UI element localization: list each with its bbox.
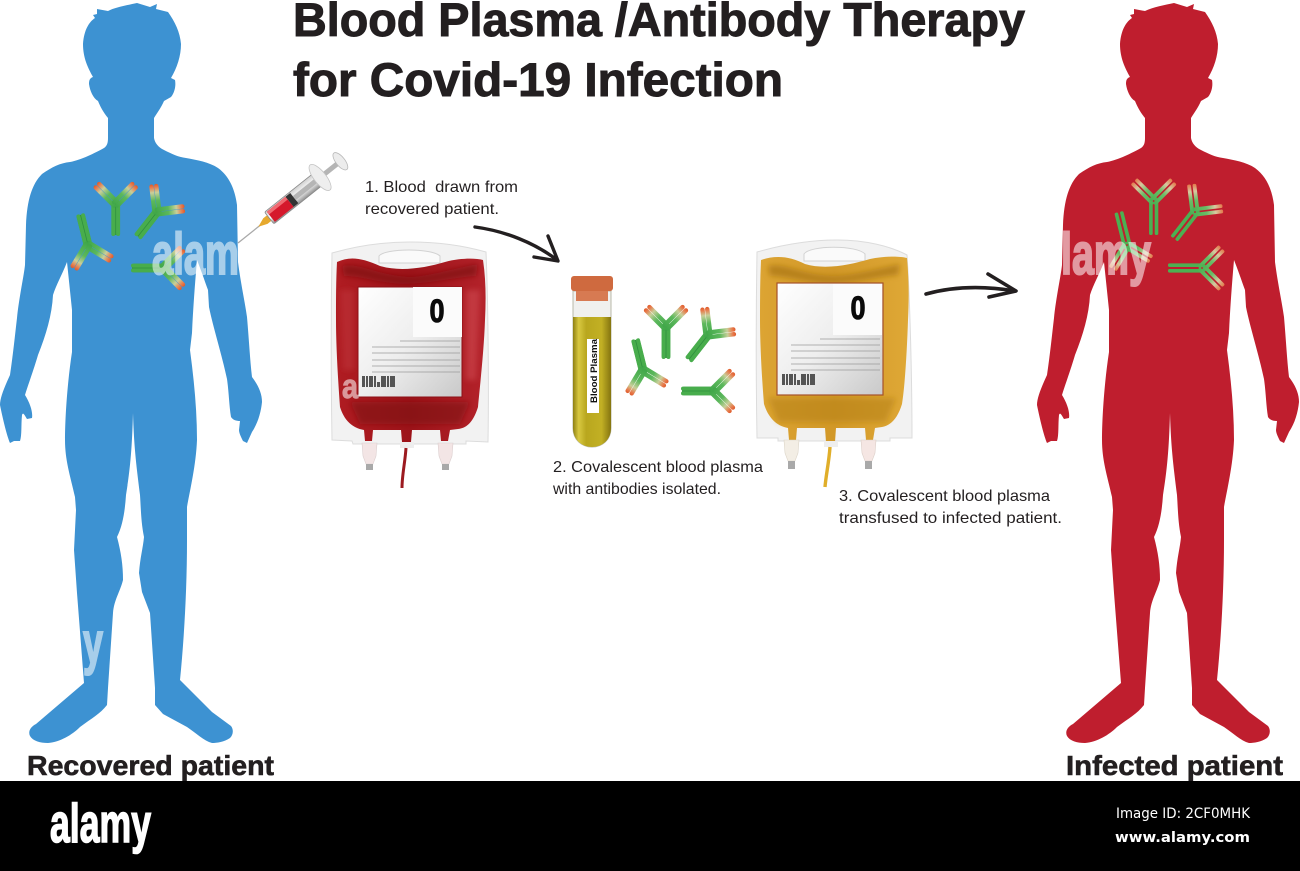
panel: recovered patient silhouette	[0, 3, 262, 743]
arrow: bag to infected patient	[926, 274, 1016, 297]
image id: Image ID: 2CF0MHK	[1116, 806, 1251, 822]
panel: red blood bag	[331, 242, 488, 488]
antibodies: isolated group	[613, 303, 740, 414]
bag handle	[379, 250, 440, 263]
blood type: 0	[850, 290, 866, 326]
panel: infected patient silhouette	[1037, 3, 1299, 743]
ports and tube	[784, 440, 876, 487]
bag handle	[804, 247, 865, 261]
text: step 2	[552, 459, 763, 498]
label lines	[791, 339, 880, 370]
text: step 2: 2. Covalescent blood plasma	[553, 459, 763, 476]
watermarks: a	[342, 368, 359, 406]
plasma shading	[768, 264, 900, 422]
watermarks: lamy	[1061, 222, 1151, 287]
panel: plasma test tube	[571, 276, 613, 447]
text: step 1	[365, 179, 518, 218]
logo: alamy: alamy	[50, 792, 151, 854]
tube cap	[571, 276, 613, 291]
text: step 3	[839, 488, 1062, 527]
antibodies in recovered patient	[58, 180, 189, 291]
blood type: 0	[430, 293, 444, 329]
text: step 2: with antibodies isolated.	[552, 481, 721, 498]
watermarks: alam	[152, 222, 239, 287]
title	[293, 0, 1025, 106]
tube glass	[573, 291, 611, 447]
title: for Covid-19 Infection	[293, 53, 783, 106]
plasma fill	[760, 257, 909, 442]
label	[777, 283, 883, 395]
barcode	[782, 374, 815, 385]
label: recovered patient: Recovered patient	[27, 750, 274, 781]
tube label	[587, 339, 599, 413]
watermarks	[83, 222, 1151, 676]
ports and tube	[362, 442, 453, 488]
plasma	[573, 317, 611, 447]
label lines	[372, 341, 460, 372]
panel: yellow plasma bag	[756, 240, 912, 487]
blood fill	[336, 259, 486, 442]
text: step 3: 3. Covalescent blood plasma	[839, 488, 1050, 505]
text: step 3: transfused to infected patient.	[839, 510, 1062, 527]
antibodies in infected patient	[1096, 178, 1227, 291]
watermarks: y	[83, 611, 103, 676]
bag plastic	[331, 242, 488, 444]
blood shading	[340, 264, 480, 424]
website: www.alamy.com	[1115, 830, 1250, 846]
bag plastic	[756, 240, 912, 441]
panel: plasma test tube: Blood Plasma	[589, 338, 600, 403]
label: infected patient: Infected patient	[1066, 750, 1283, 781]
label	[358, 287, 462, 397]
icon: syringe	[228, 146, 354, 256]
arrow: step 1 to tube	[475, 227, 558, 261]
barcode	[362, 376, 395, 387]
footer bar	[0, 781, 1300, 871]
text: step 1: recovered patient.	[365, 201, 499, 218]
text: step 1: 1. Blood drawn from	[365, 179, 518, 196]
